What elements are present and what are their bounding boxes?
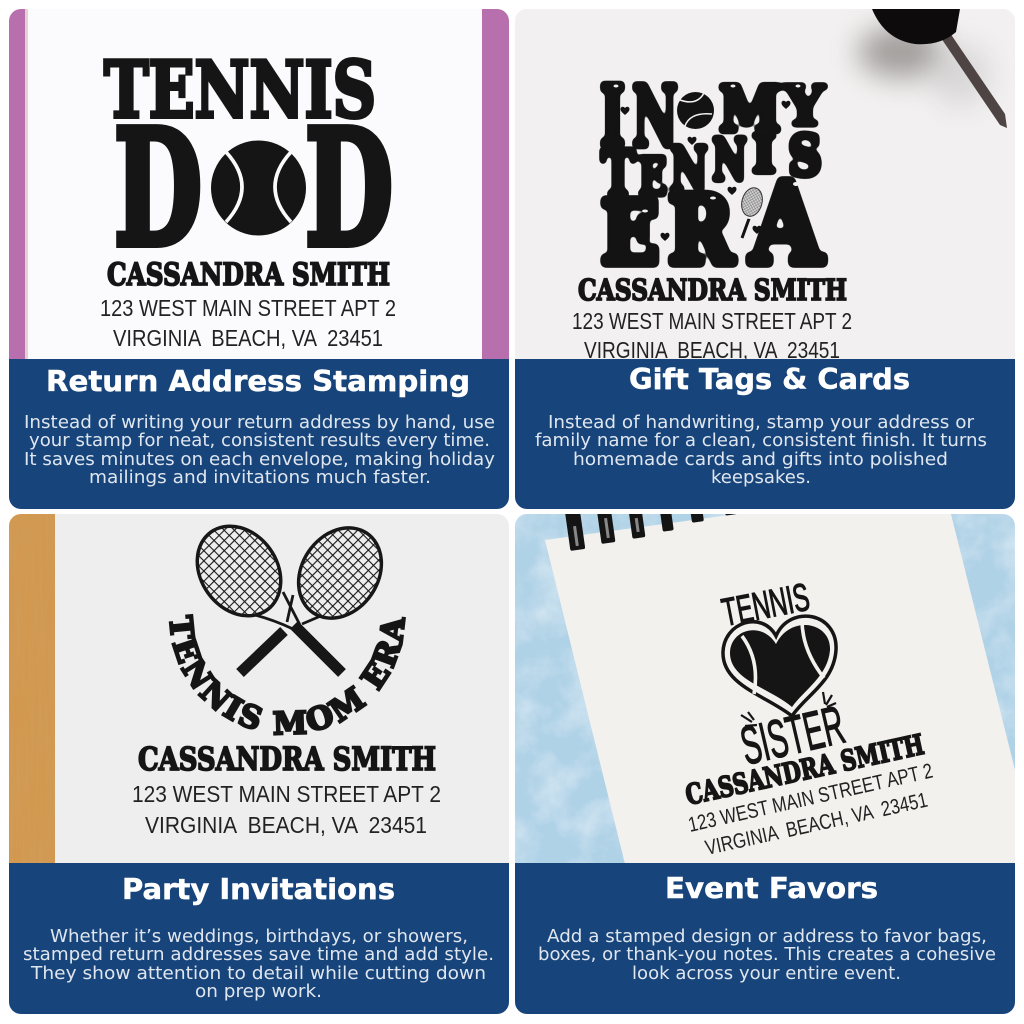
icon: racket <box>740 187 763 238</box>
line: era <box>600 176 828 268</box>
line: era: E <box>601 183 659 284</box>
line: tennis: S <box>788 123 822 189</box>
description <box>535 413 987 488</box>
address line 1: 123 WEST MAIN STREET APT 2 <box>100 295 396 321</box>
photo: paper with stamp handle <box>515 9 1015 360</box>
caption panel <box>9 359 509 510</box>
heading: Gift Tags & Cards <box>629 363 910 396</box>
photo: notebook on blue background <box>515 504 1015 864</box>
description: look across your entire event. <box>632 964 901 984</box>
letter D left: D <box>114 96 202 282</box>
line: era: R <box>668 176 735 286</box>
description: family name for a clean, consistent finish. It turns <box>535 431 987 451</box>
panel: return address stamping <box>9 9 509 510</box>
icons: small hearts <box>620 101 790 241</box>
stamp: in my tennis era <box>572 67 852 363</box>
line: in my: I <box>600 67 625 166</box>
name: CASSANDRA SMITH <box>138 740 436 778</box>
photo: envelope on pink background <box>9 9 509 360</box>
address line 1: 123 WEST MAIN STREET APT 2 <box>572 308 852 334</box>
description: Instead of writing your return address by hand, use <box>24 413 495 433</box>
address line 2: VIRGINIA BEACH, VA 23451 <box>703 789 930 860</box>
panel: party invitations <box>9 514 509 1014</box>
heading: Party Invitations <box>122 873 395 906</box>
caption panel <box>515 359 1015 510</box>
icon: crossed rackets <box>196 524 384 677</box>
address line 2: VIRGINIA BEACH, VA 23451 <box>584 337 840 363</box>
line: tennis: I <box>752 124 776 185</box>
word: sister: SISTER <box>735 695 850 777</box>
line: in my: Y <box>783 73 826 138</box>
description: your stamp for neat, consistent results every time. <box>29 431 490 451</box>
heading: Return Address Stamping <box>46 365 470 398</box>
panel: gift tags and cards <box>515 9 1015 510</box>
icon: spiral rings <box>565 504 737 551</box>
line: in my <box>600 80 828 150</box>
line: tennis <box>599 130 822 198</box>
stamp: tennis dad <box>100 45 396 351</box>
address line 1: 123 WEST MAIN STREET APT 2 <box>132 781 441 807</box>
line: tennis: T <box>601 137 635 212</box>
name: CASSANDRA SMITH <box>682 728 927 812</box>
icon: tennis heart <box>723 616 836 716</box>
description: mailings and invitations much faster. <box>89 468 431 488</box>
letter D right: D <box>305 96 393 282</box>
arc text: TENNIS MOM ERA <box>168 614 406 736</box>
description: Instead of handwriting, stamp your address or <box>548 413 975 433</box>
word: tennis: TENNIS <box>719 576 813 635</box>
description: Whether it’s weddings, birthdays, or showers, <box>50 927 468 947</box>
description: boxes, or thank-you notes. This creates a cohesive <box>538 945 996 965</box>
icon: letter highlights <box>614 84 800 212</box>
icon: tennis ball <box>677 92 714 129</box>
line: era: A <box>749 159 825 290</box>
line: in my: M <box>719 72 781 146</box>
line: tennis: N <box>712 126 747 194</box>
icon: splash marks <box>741 692 836 726</box>
description <box>538 927 996 984</box>
description: They show attention to detail while cutting down <box>30 964 486 984</box>
description <box>24 413 495 488</box>
line: tennis: N <box>670 133 708 206</box>
description: stamped return addresses save time and add style. <box>23 945 494 965</box>
panel: event favors <box>515 504 1015 1014</box>
stamp: tennis sister <box>682 576 935 860</box>
word: tennis: TENNIS <box>104 45 376 136</box>
description: keepsakes. <box>711 468 811 488</box>
address line 2: VIRGINIA BEACH, VA 23451 <box>145 812 427 838</box>
description: Add a stamped design or address to favor bags, <box>547 927 987 947</box>
line: in my: N <box>632 67 678 166</box>
icon: tennis ball <box>211 140 306 236</box>
description <box>23 927 494 1002</box>
address line 1: 123 WEST MAIN STREET APT 2 <box>686 759 935 837</box>
name: CASSANDRA SMITH <box>578 273 847 307</box>
photo: card on wood <box>9 514 509 864</box>
line: tennis: E <box>638 147 667 208</box>
caption panel <box>9 863 509 1014</box>
description: on prep work. <box>195 982 322 1002</box>
description: It saves minutes on each envelope, making holiday <box>24 450 495 470</box>
caption panel <box>515 863 1015 1014</box>
stamp: tennis mom era <box>134 524 440 836</box>
heading: Event Favors <box>665 872 878 905</box>
name: CASSANDRA SMITH <box>107 257 390 293</box>
address line 2: VIRGINIA BEACH, VA 23451 <box>113 325 383 351</box>
description: homemade cards and gifts into polished <box>573 450 948 470</box>
